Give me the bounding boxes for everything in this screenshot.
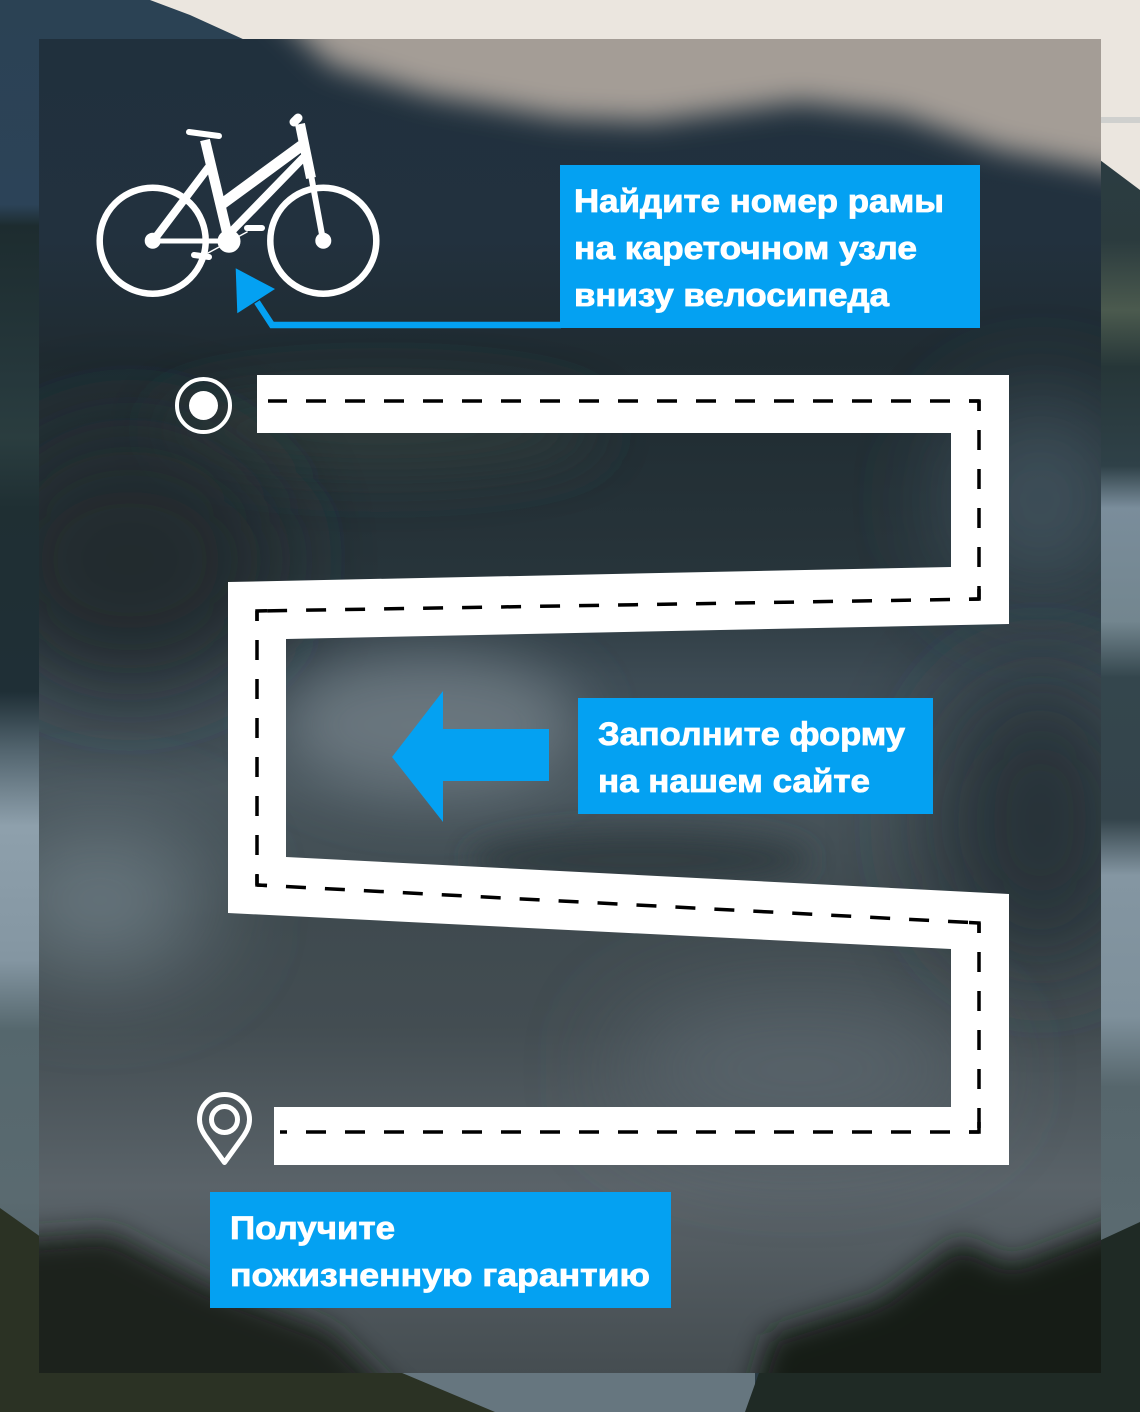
- callout: get lifetime warranty: Получите: [230, 1210, 395, 1246]
- callout: get lifetime warranty: пожизненную гарантию: [230, 1257, 650, 1293]
- callout: find frame number: Найдите номер рамы: [574, 183, 944, 219]
- icon: bicycle: [100, 118, 376, 294]
- arrow: points left to road: [392, 691, 549, 822]
- icon: route start marker: [177, 379, 230, 432]
- callout: find frame number: [560, 165, 980, 328]
- arrow: to bottom bracket: [236, 268, 561, 325]
- callout: find frame number: на кареточном узле: [574, 230, 917, 266]
- callout: get lifetime warranty: [210, 1192, 671, 1308]
- callout: fill in the form: [578, 698, 933, 814]
- callout: find frame number: внизу велосипеда: [574, 277, 889, 313]
- callout: fill in the form: на нашем сайте: [598, 763, 870, 799]
- icon: location pin: [200, 1095, 250, 1162]
- callout: fill in the form: Заполните форму: [598, 716, 905, 752]
- winding road: [228, 375, 1009, 1165]
